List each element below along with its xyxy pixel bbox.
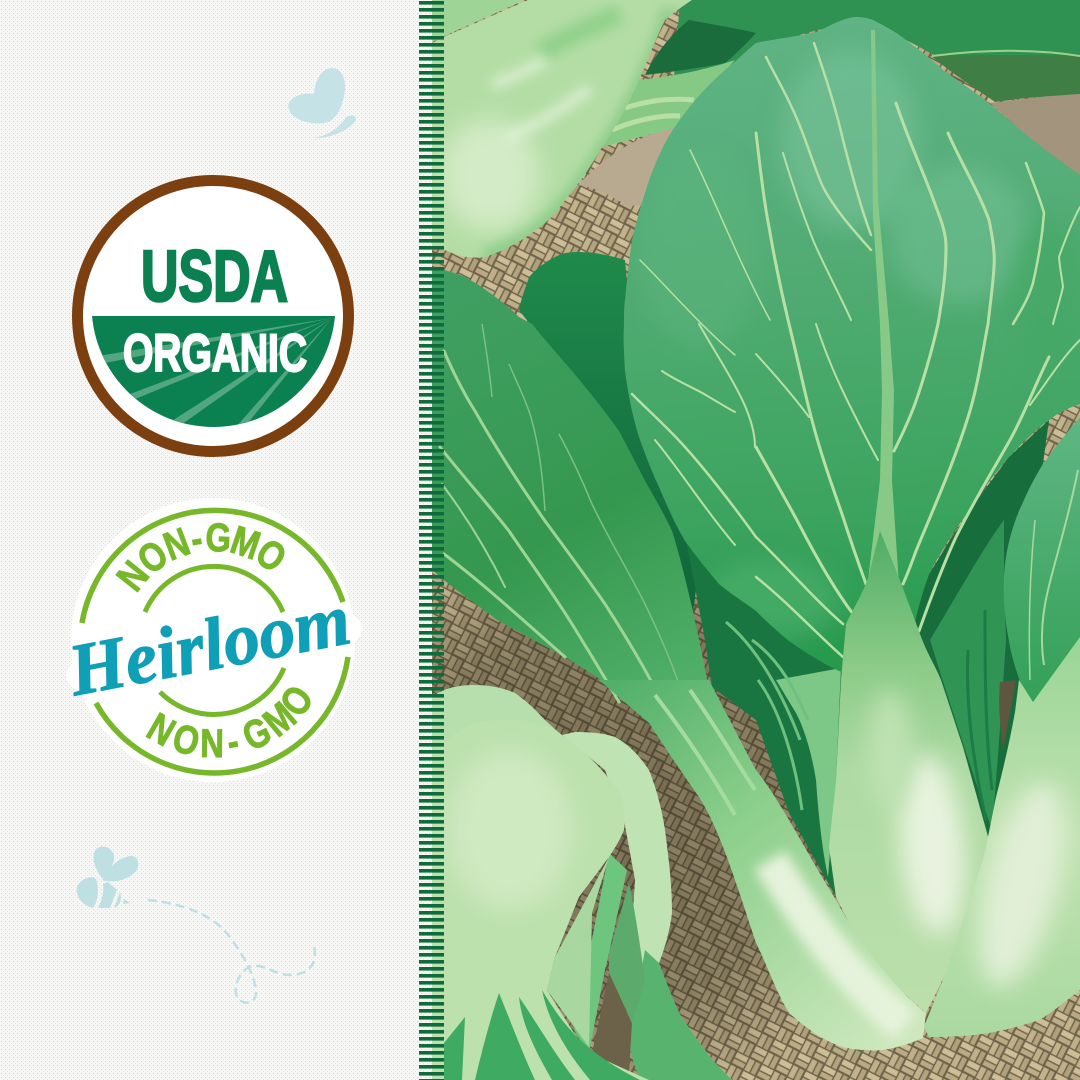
NON-GMO top text: G xyxy=(204,514,232,561)
burlap gap xyxy=(592,973,632,1072)
NON-GMO bottom text: O xyxy=(271,677,322,724)
rib lines xyxy=(612,99,694,130)
burlap mat xyxy=(432,0,1080,1080)
left leaf thin veins xyxy=(482,324,685,702)
left large leaf xyxy=(432,267,712,704)
NON-GMO bottom text: G xyxy=(236,708,278,759)
NON-GMO top text: O xyxy=(248,530,294,581)
stem pale core xyxy=(770,860,905,1026)
inner dark stalk xyxy=(609,883,645,1023)
bottom-left bok choy xyxy=(432,685,732,1080)
bee wings and body xyxy=(77,847,138,908)
inner arc top xyxy=(145,566,283,612)
NON-GMO bottom text: O xyxy=(168,715,204,765)
top stalk ribs xyxy=(602,60,735,147)
white script backing xyxy=(59,585,369,719)
main leaf veins xyxy=(632,43,1080,657)
inner arc bottom xyxy=(160,668,284,714)
burlap shading xyxy=(432,0,1080,1080)
NON-GMO top text: - xyxy=(187,516,205,562)
NON-GMO bottom text xyxy=(140,677,322,766)
top-left stem xyxy=(432,0,692,258)
left leaf veins xyxy=(440,351,662,702)
central stem xyxy=(829,531,989,1013)
NON-GMO top text: N xyxy=(158,519,196,569)
right stem xyxy=(924,637,1080,1037)
right dark stalks xyxy=(905,420,1049,843)
cloth patch top right xyxy=(990,92,1080,178)
inner green stalk xyxy=(574,853,627,1053)
side stalk green lower xyxy=(629,950,732,1080)
NON-GMO top text: N xyxy=(108,553,158,599)
burlap gap xyxy=(999,680,1016,750)
striped divider xyxy=(419,0,444,1080)
badge: Heirloom Non-GMO xyxy=(59,498,369,782)
outer arc top xyxy=(82,510,343,623)
back lobe xyxy=(432,685,562,760)
USDA text: USDA xyxy=(141,237,288,317)
leaf tonal patches xyxy=(640,50,1080,640)
back stalks behind main leaf xyxy=(684,530,843,897)
NON-GMO top text: O xyxy=(129,531,176,583)
base green fingers xyxy=(444,990,640,1080)
top dark leaf xyxy=(670,0,1080,130)
grey cloth under top stem xyxy=(560,125,680,206)
stem shading xyxy=(440,10,672,258)
panel: fabric background xyxy=(0,0,432,1080)
stem ribs xyxy=(655,690,755,815)
icon: bee with dashed trail xyxy=(77,847,315,1003)
side stalk xyxy=(562,732,732,1080)
dark hollow top xyxy=(645,20,756,75)
stem highlights xyxy=(868,690,972,937)
pale stalk rib xyxy=(776,668,841,877)
left leaf stem xyxy=(599,680,926,1050)
right stem highlight xyxy=(969,776,1074,995)
corner sliver xyxy=(432,0,525,42)
stalk lines xyxy=(967,610,992,820)
outer arc bottom xyxy=(96,657,348,773)
leaf edge highlight xyxy=(932,51,1080,56)
front lobe xyxy=(432,720,649,1080)
front lobe glow xyxy=(448,750,572,910)
seal ring xyxy=(78,180,348,452)
main large leaf xyxy=(624,17,1080,680)
icon: butterfly xyxy=(288,68,356,138)
badge: USDA Organic xyxy=(78,180,348,452)
photo: bok choy on burlap xyxy=(432,0,1080,1080)
Heirloom script: Heirloom xyxy=(61,579,357,712)
right leaf veins xyxy=(1029,470,1078,680)
NON-GMO bottom text: M xyxy=(255,693,304,745)
NON-GMO bottom text: N xyxy=(200,721,224,766)
NON-GMO bottom text: - xyxy=(223,718,242,764)
NON-GMO bottom text: N xyxy=(140,704,183,755)
right leaf xyxy=(1004,417,1080,702)
dark leaf behind xyxy=(519,252,700,620)
green field xyxy=(92,316,335,427)
dashed flight trail xyxy=(148,900,315,1003)
inner pale stalk xyxy=(547,857,609,1047)
white backing xyxy=(71,498,355,782)
field rays xyxy=(102,318,331,424)
ORGANIC text: ORGANIC xyxy=(123,324,307,383)
NON-GMO top text: M xyxy=(226,517,266,568)
NON-GMO top text xyxy=(108,514,294,599)
pale stalk bands xyxy=(930,520,1006,830)
midrib xyxy=(846,30,919,640)
shaded leaf underside xyxy=(930,55,1080,102)
stalk lines xyxy=(726,622,808,810)
